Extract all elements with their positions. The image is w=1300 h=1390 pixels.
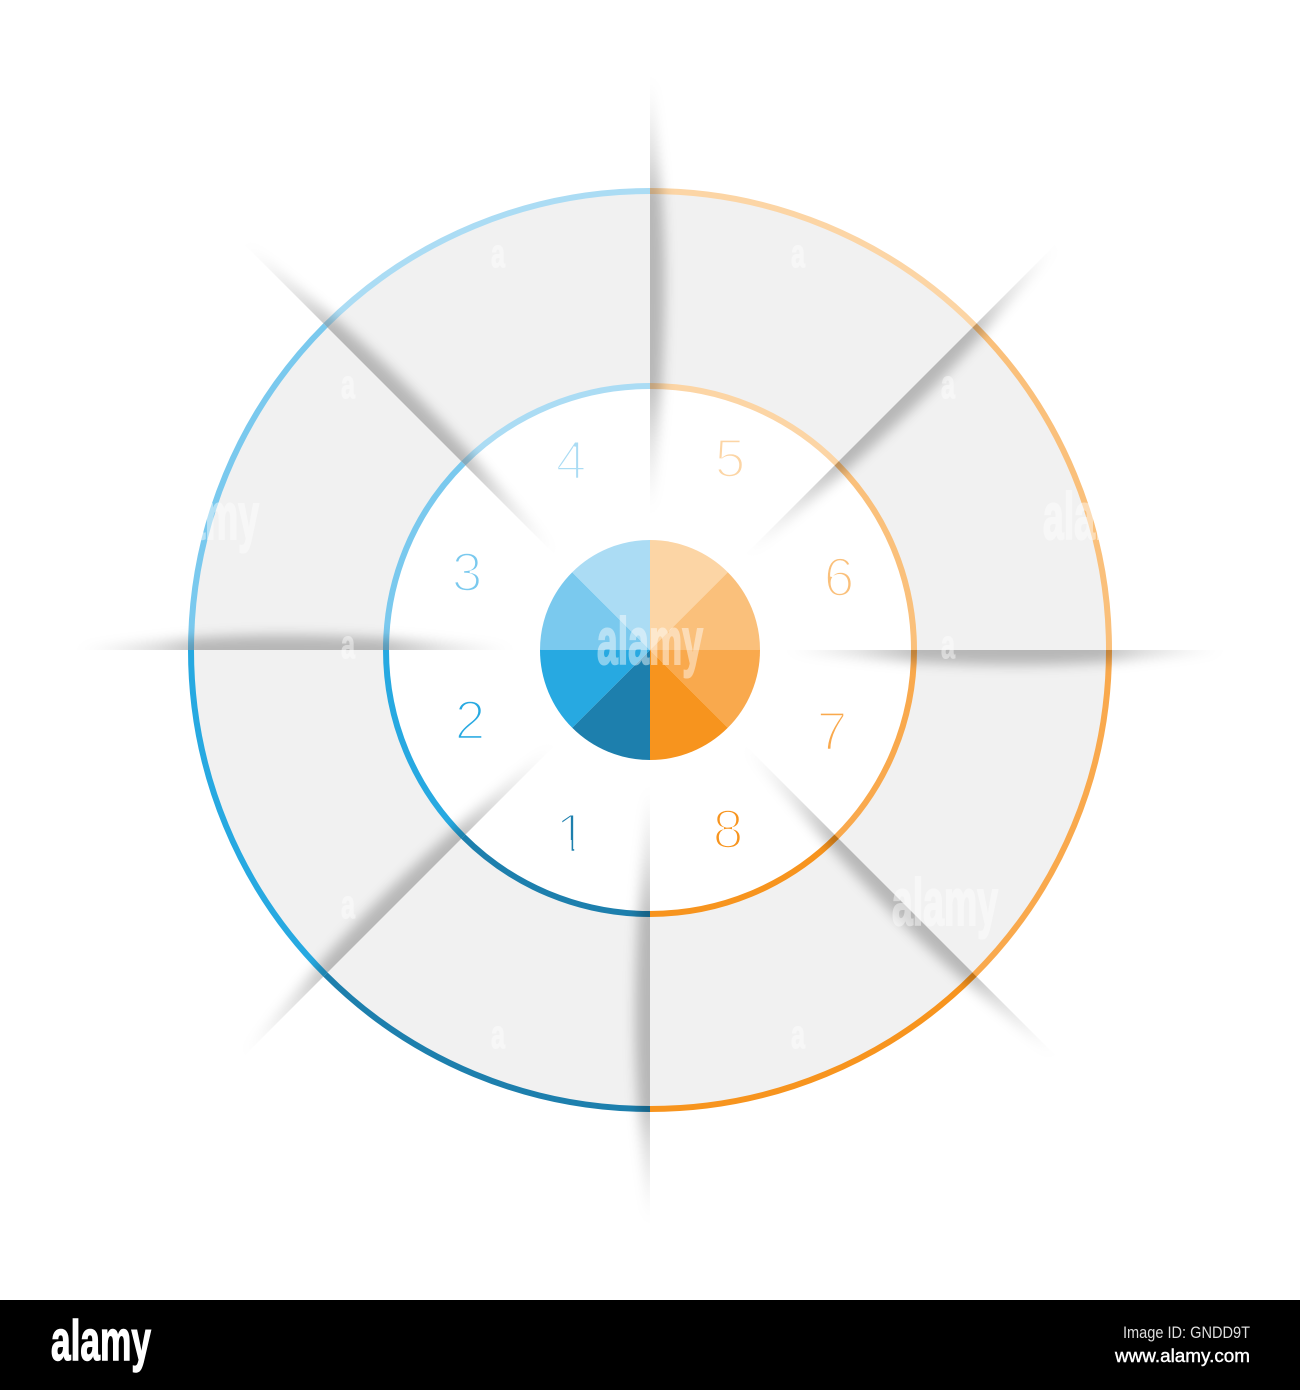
footer logo: alamy (51, 1309, 151, 1373)
stock photo watermarks: a (791, 232, 805, 276)
stock photo watermarks: a (341, 623, 355, 667)
segment numbers 1 to 8: 3 (452, 541, 482, 603)
stock photo watermarks: a (341, 883, 355, 927)
stock photo watermarks: alamy (1043, 479, 1149, 553)
segment numbers 1 to 8: 8 (713, 798, 743, 860)
stock photo watermarks: a (491, 1013, 505, 1057)
segment numbers 1 to 8: 1 (556, 802, 586, 864)
stock photo watermarks: a (491, 232, 505, 276)
centre pie with eight wedges (540, 540, 760, 760)
inner ring with eight coloured arcs (386, 386, 914, 914)
black footer bar (0, 1300, 1300, 1390)
stock photo watermarks (153, 232, 1149, 1057)
stock photo watermarks: alamy (892, 865, 998, 939)
segment numbers 1 to 8: 2 (455, 689, 485, 751)
segment numbers 1 to 8 (452, 427, 854, 864)
segment numbers 1 to 8: 6 (824, 546, 854, 608)
stock photo watermarks: a (941, 363, 955, 407)
gray outer donut (288, 288, 1012, 1012)
stock photo watermarks: alamy (597, 604, 703, 678)
website: www.alamy.com (1114, 1346, 1250, 1366)
outer ring with eight coloured arcs (191, 191, 1109, 1109)
image id: Image ID: GNDD9T (1123, 1323, 1250, 1342)
stock photo watermarks: a (791, 1013, 805, 1057)
stock photo watermarks: alamy (153, 479, 259, 553)
segment numbers 1 to 8: 4 (556, 429, 586, 491)
stock photo watermarks: a (341, 363, 355, 407)
segment numbers 1 to 8: 7 (817, 700, 847, 762)
stock photo watermarks: a (941, 623, 955, 667)
segment numbers 1 to 8: 5 (715, 427, 745, 489)
fold shadows, pinwheel of eight (110, 110, 1190, 1190)
